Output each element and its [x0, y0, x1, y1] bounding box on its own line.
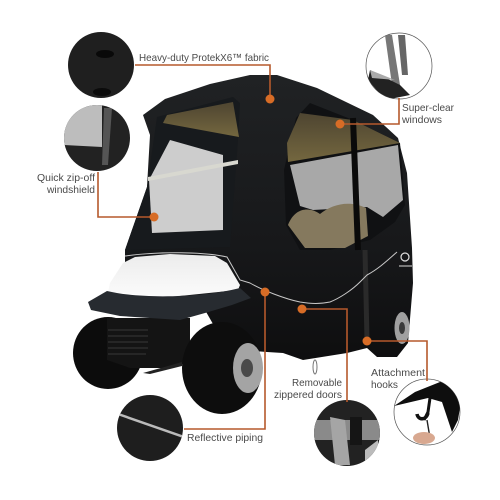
front bumper	[88, 288, 251, 320]
connector line	[135, 65, 270, 99]
marker dot	[298, 304, 306, 314]
label: windshield: windshield	[46, 184, 95, 196]
front right tire	[182, 322, 262, 414]
callout: super-clear windows	[336, 33, 454, 128]
front grille	[107, 318, 190, 368]
hood	[108, 254, 240, 297]
detail circle: hook	[394, 379, 462, 445]
marker dot	[336, 120, 344, 128]
side window	[284, 103, 405, 250]
connector line	[367, 341, 427, 381]
infographic: golf cart cover features	[38, 32, 460, 466]
golf cart illustration	[73, 75, 413, 414]
hanging hook	[313, 360, 317, 374]
label: Attachment	[371, 367, 425, 379]
connector line	[302, 309, 347, 402]
front right hub	[233, 343, 263, 393]
connector line	[340, 98, 399, 124]
logo	[399, 253, 412, 266]
detail circle: window	[366, 33, 432, 100]
cover body	[125, 75, 413, 360]
marker dot	[150, 212, 158, 222]
vertical zipper strap	[365, 250, 367, 340]
windshield pane	[149, 140, 223, 233]
callout: attachment hooks	[362, 336, 462, 445]
label: Removable	[292, 377, 342, 389]
detail circle: piping	[117, 395, 184, 461]
label: windows: windows	[401, 114, 442, 126]
label: Quick zip-off	[37, 172, 95, 184]
connector line	[98, 172, 154, 217]
detail circle: windshield	[64, 105, 130, 171]
windshield frame	[125, 97, 240, 250]
marker dot	[266, 94, 274, 104]
windshield tan top	[163, 102, 239, 137]
connector line	[184, 292, 265, 429]
axle	[143, 362, 182, 374]
callout: reflective piping	[117, 288, 270, 461]
windshield bar	[148, 160, 238, 181]
label: Reflective piping	[187, 432, 263, 444]
marker dot	[260, 288, 270, 296]
label: Heavy-duty ProtekX6™ fabric	[139, 52, 269, 64]
detail circle: fabric	[68, 32, 134, 98]
marker dot	[362, 336, 372, 346]
label: Super-clear	[402, 102, 454, 114]
reflective piping	[125, 252, 397, 304]
callout: quick zip-off windshield	[37, 105, 158, 222]
callout: heavy-duty fabric	[68, 32, 274, 104]
callout: removable zippered doors	[292, 304, 381, 466]
label: zippered doors: zippered doors	[274, 389, 342, 401]
label: hooks: hooks	[371, 379, 398, 391]
rear wheel	[394, 312, 410, 344]
detail circle: door	[314, 400, 381, 466]
front left tire	[73, 317, 143, 389]
